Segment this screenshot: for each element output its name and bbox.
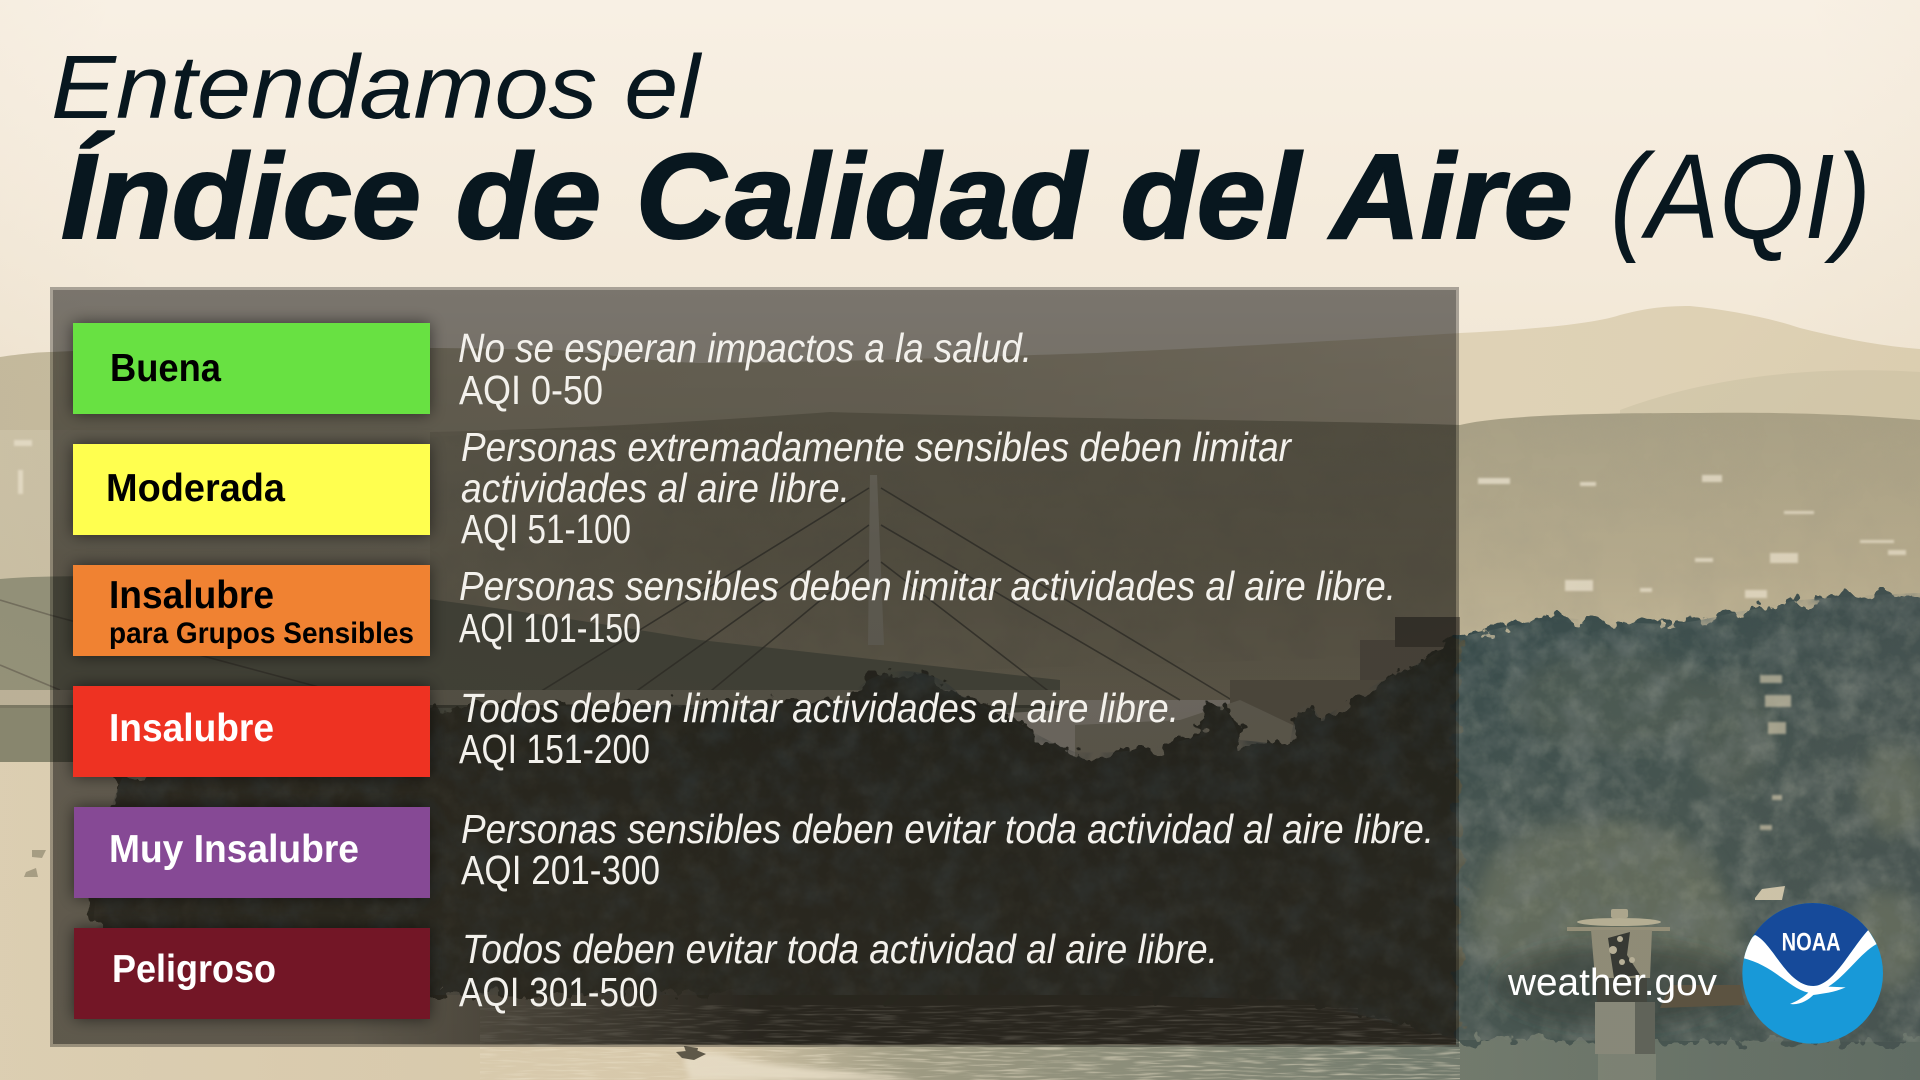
color bar: orange [73,565,430,656]
left bank texture [0,705,430,762]
row: Moderada [73,424,1293,552]
label: Insalubre red: Insalubre [109,707,274,750]
far mountain ridge [0,306,1920,600]
label: Peligroso: Peligroso [112,948,276,991]
tower spots [1609,936,1635,965]
tower neck [1597,978,1647,1002]
panel inner [53,290,1456,1044]
tree canopy light clumps [1470,745,1920,990]
bridge deck [0,690,1060,705]
row: Peligroso [74,926,1218,1019]
tree mass [93,593,1920,1042]
icon: NOAA logo [1742,903,1883,1044]
logo wordmark: NOAA [1782,928,1841,956]
tower disc [1577,918,1661,926]
description: maroon: Todos deben evitar toda actividad al aire libre. [462,926,1218,972]
building block low [1230,680,1460,750]
label: Muy Insalubre: Muy Insalubre [109,828,359,871]
panel: AQI categories [50,287,1459,1047]
logo lower blue [1742,903,1883,1044]
title acronym: (AQI) [1610,128,1871,264]
title line 1: Entendamos el [51,38,703,138]
sky [0,0,1920,480]
range: purple: AQI 201-300 [461,847,660,893]
description: Moderada line 1: Personas extremadamente sensibles deben limitar [461,424,1293,470]
color bar: Moderada [73,444,430,535]
tan clearings among trees [1760,675,1791,830]
tower reflection [1598,1054,1656,1080]
tower column [1595,1002,1655,1054]
second hill layer [1620,370,1920,430]
roof behind tower [1660,985,1745,1008]
description: red: Todos deben limitar actividades al aire libre. [460,685,1179,731]
building block top [1395,617,1460,647]
building block mid [1360,640,1460,680]
description: orange: Personas sensibles deben limitar actividades al aire libre. [459,563,1396,609]
range: red: AQI 151-200 [459,726,650,772]
river water [0,762,1920,1080]
label: Moderada: Moderada [106,467,285,510]
color bar: red [73,686,430,777]
town texture [430,400,1920,720]
boat wake [683,1053,920,1080]
range: orange: AQI 101-150 [459,605,641,651]
left boats [24,850,46,877]
car on the bank [1755,886,1785,900]
tower body [1591,930,1652,978]
tower knob [1611,909,1628,918]
title line 2 bold: Índice de Calidad del Aire [61,128,1573,264]
bridge cables [0,488,1240,760]
town hillside [430,412,1920,700]
boat [676,1046,706,1060]
tower dark surround [1495,943,1745,1027]
row: Insalubre [73,685,1179,777]
river sparkles [480,1005,1460,1080]
range: maroon: AQI 301-500 [459,969,658,1015]
low roofs [1075,700,1335,765]
label: Buena: Buena [110,347,221,390]
description: Buena: No se esperan impactos a la salud. [458,325,1032,371]
website: weather.gov: weather.gov [1507,962,1717,1004]
description: Moderada line 2: actividades al aire libre. [461,465,850,511]
label: Insalubre orange: Insalubre [109,574,274,617]
dark reflected water under panel [350,985,1456,1045]
tower flange [1567,927,1670,931]
range: Buena: AQI 0-50 [459,367,603,413]
color bar: maroon [74,928,430,1019]
label: para Grupos Sensibles: para Grupos Sensibles [109,617,414,650]
dark hill left of the bridge [0,575,1060,770]
row: Muy Insalubre [74,806,1434,898]
description: purple: Personas sensibles deben evitar toda actividad al aire libre. [461,806,1434,852]
logo upper dark blue [1753,903,1868,986]
panel frame [50,287,1459,1047]
apartment buildings [1075,617,1512,765]
row: Buena [73,323,1032,414]
upper canopy tone [1510,650,1770,790]
bridge pylon [868,475,884,645]
row: Insalubre para Grupos Sensibles [73,563,1396,656]
title [51,38,1871,264]
water tower [1495,909,1745,1080]
tree canopy texture [0,590,1920,1050]
houses on hillside [14,440,1906,598]
small white building [1460,638,1512,652]
range: Moderada: AQI 51-100 [461,506,631,552]
left town hillside fade [0,430,700,700]
color bar: Buena [73,323,430,414]
logo white wave and bird [1737,930,1877,1004]
color bar: purple [74,807,430,898]
